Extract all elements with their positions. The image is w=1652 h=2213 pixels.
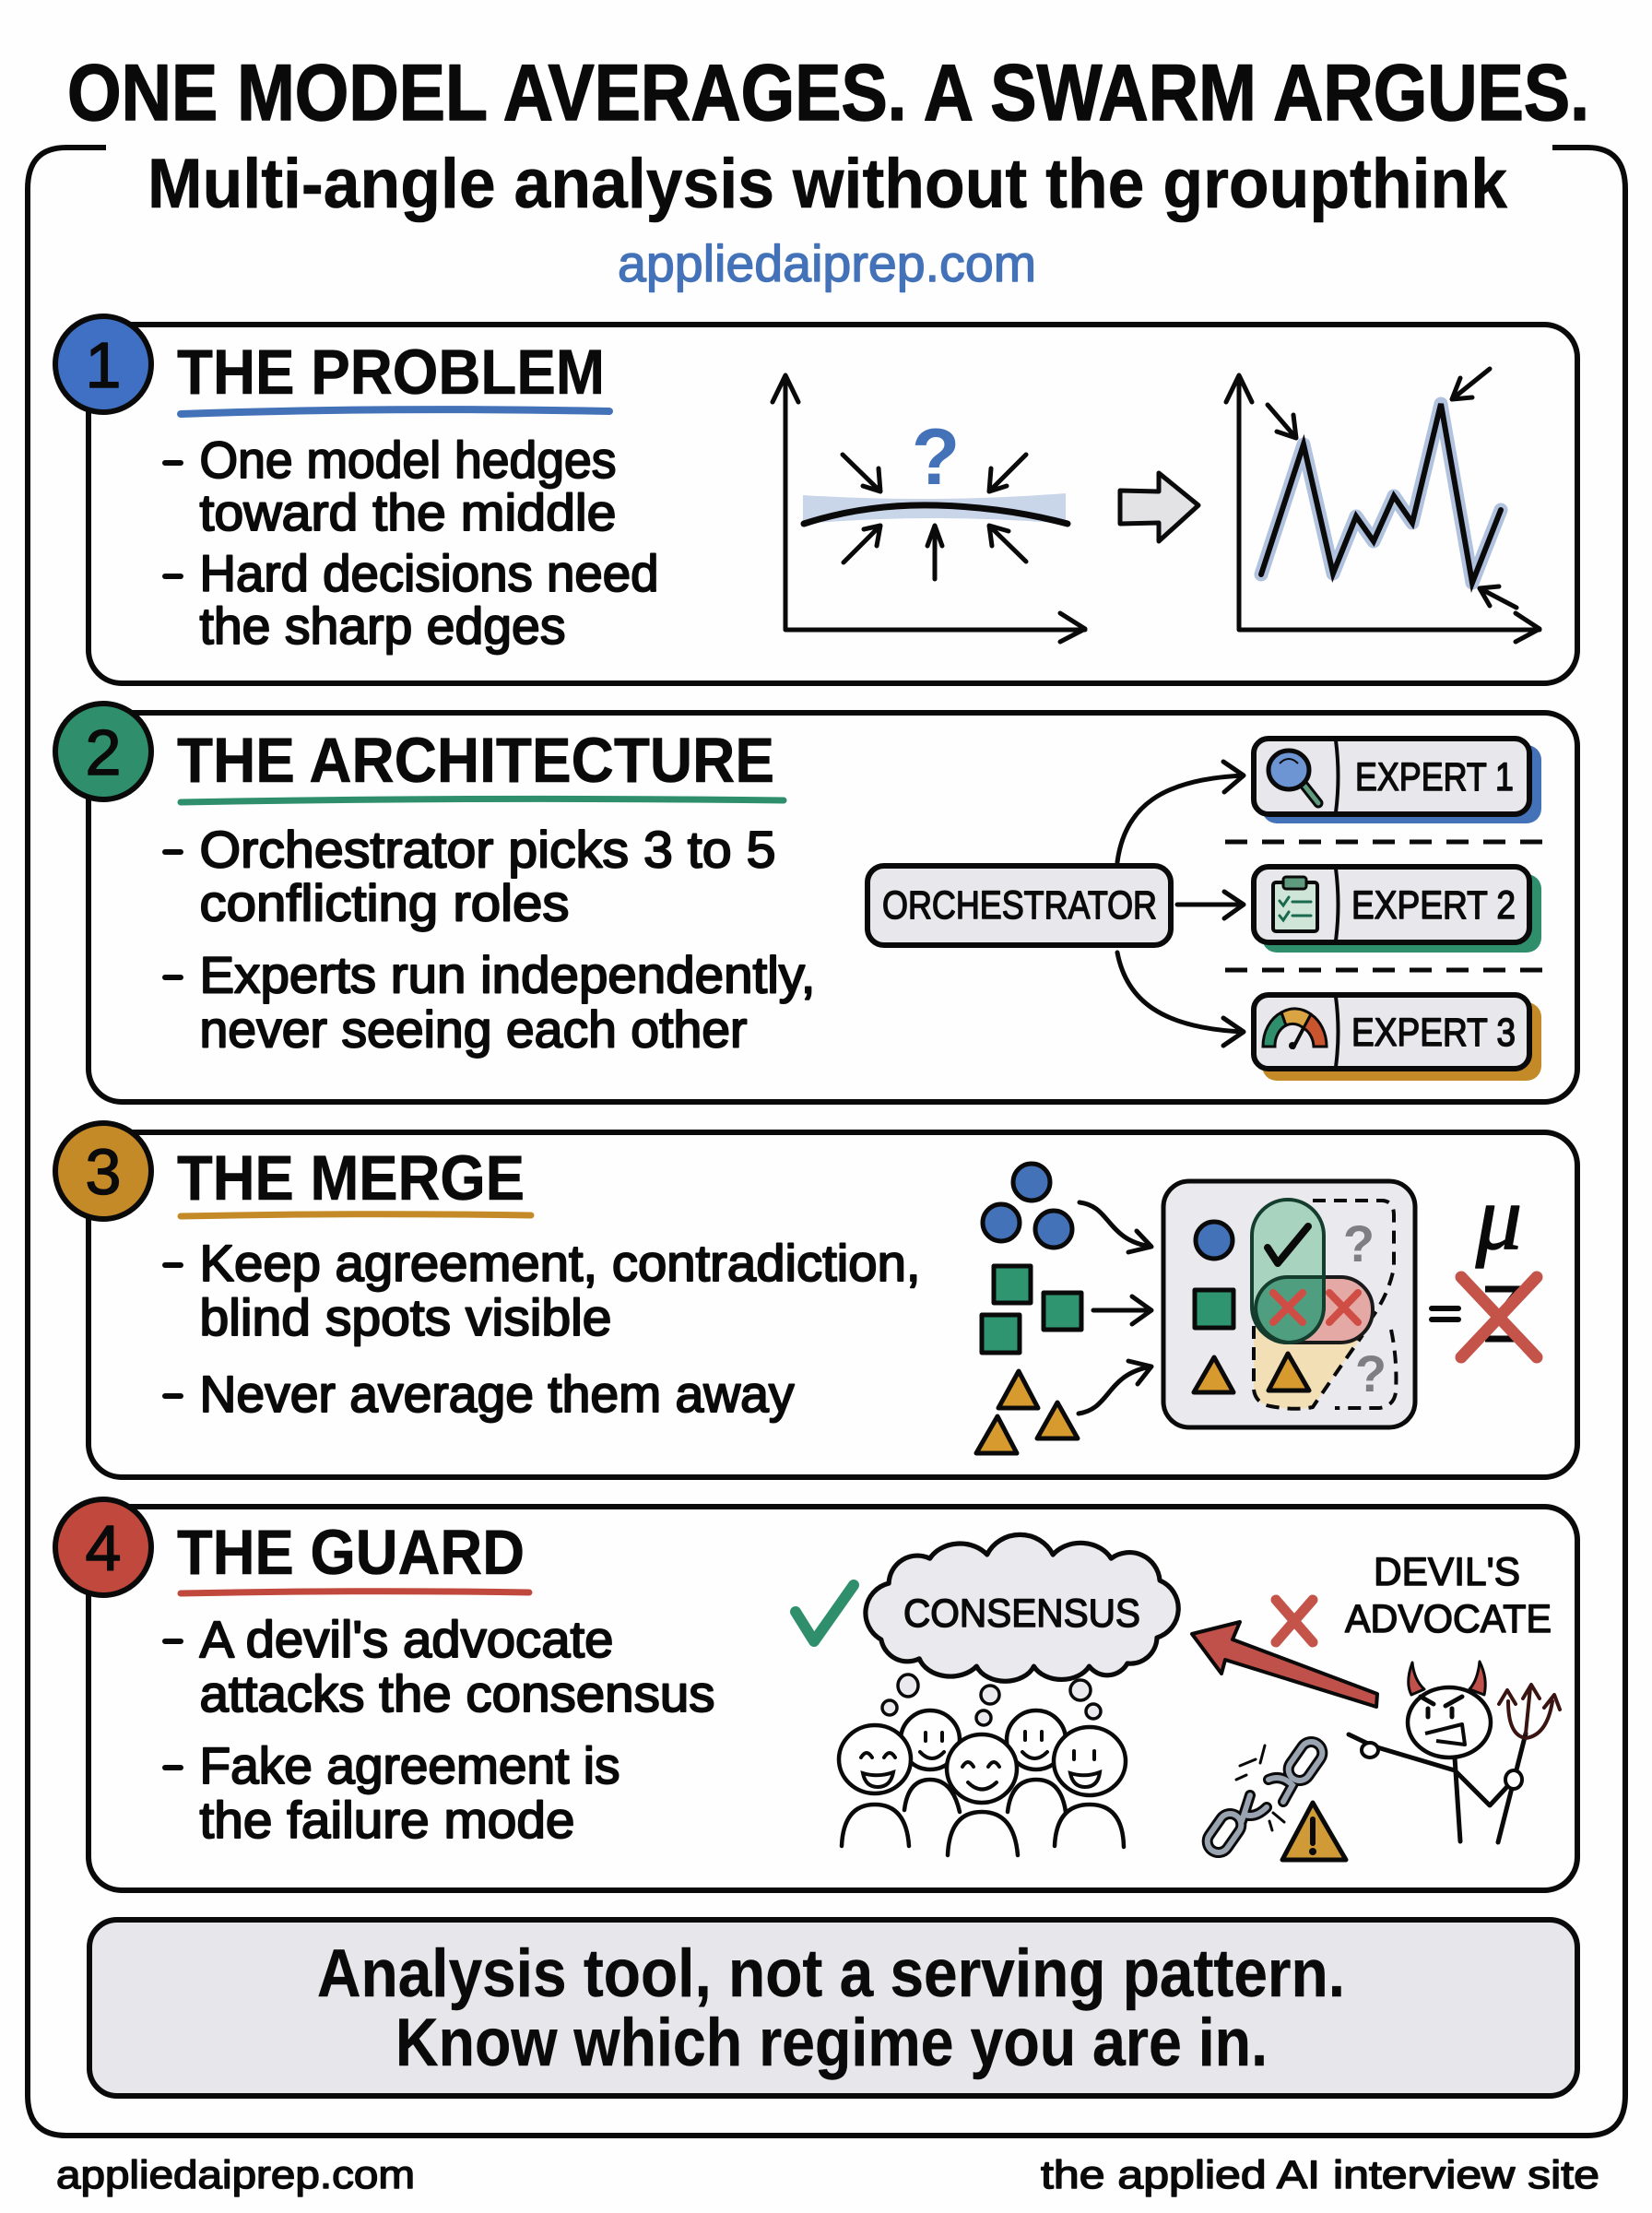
board shapes	[1196, 1222, 1233, 1259]
heading underline	[181, 799, 784, 802]
subtitle: Multi-angle analysis without the groupthink	[148, 145, 1508, 223]
agreeing crowd	[839, 1710, 1126, 1855]
thought bubbles	[882, 1675, 1101, 1725]
panel: the problem	[55, 316, 1577, 683]
site link: appliedaiprep.com	[618, 234, 1036, 292]
merge board	[1163, 1181, 1415, 1427]
number badge 1	[55, 316, 151, 412]
not-the-mean symbol	[1432, 1166, 1537, 1357]
devil's advocate label	[1345, 1550, 1552, 1641]
bullets: architecture	[162, 821, 815, 1059]
bullets: guard: attacks the consensus	[199, 1664, 715, 1722]
icon: red x	[1276, 1600, 1313, 1642]
number badge 3	[55, 1123, 151, 1219]
number badge 3: 3	[86, 1136, 121, 1208]
inputs: amber triangles	[976, 1371, 1078, 1453]
attack arrow	[1192, 1622, 1377, 1707]
heading: the guard: THE GUARD	[177, 1517, 525, 1588]
heading: the architecture: THE ARCHITECTURE	[177, 725, 774, 796]
number badge 4	[55, 1499, 151, 1595]
devil figure	[1349, 1662, 1560, 1842]
expert card 3	[1254, 995, 1541, 1081]
icon: gauge	[1263, 1009, 1327, 1049]
bullets: problem: the sharp edges	[199, 597, 566, 655]
bullets: guard: the failure mode	[199, 1791, 575, 1849]
number badge 2: 2	[86, 716, 121, 788]
bullets: architecture: Orchestrator picks 3 to 5	[199, 821, 776, 878]
icon: warning triangle	[1282, 1803, 1346, 1860]
consensus cloud	[866, 1534, 1178, 1681]
bullets: architecture: never seeing each other	[199, 1000, 747, 1059]
devil's advocate label: DEVIL'S	[1374, 1550, 1520, 1594]
inputs: blue circles	[983, 1164, 1072, 1248]
bullets: merge: Keep agreement, contradiction,	[199, 1234, 920, 1292]
expert card 2: EXPERT 2	[1351, 883, 1516, 928]
icon: magnifier	[1268, 751, 1318, 803]
not-the-mean symbol: μ	[1475, 1166, 1522, 1269]
inputs: green squares	[982, 1266, 1081, 1353]
consensus cloud: CONSENSUS	[903, 1592, 1140, 1636]
number badge 2	[55, 704, 151, 799]
chart: flat averaged line: ?	[912, 413, 960, 502]
arrow: flat to spiky	[1120, 473, 1198, 541]
devil's advocate label: ADVOCATE	[1345, 1597, 1552, 1641]
footer left: appliedaiprep.com	[56, 2153, 415, 2197]
blind-spot triangle	[1268, 1354, 1309, 1391]
bullets: problem	[162, 431, 658, 655]
blind-spot question marks: ?	[1343, 1214, 1375, 1272]
contradiction marks	[1273, 1293, 1358, 1322]
bullets: problem: Hard decisions need	[199, 544, 658, 602]
icon: clipboard	[1273, 877, 1317, 931]
icon: green check	[796, 1585, 854, 1641]
expert card 1	[1254, 739, 1541, 823]
dashed blind-spot outline	[1313, 1201, 1396, 1408]
expert card 1: EXPERT 1	[1355, 755, 1514, 799]
bullets: guard: A devil's advocate	[199, 1610, 614, 1668]
heading underline	[181, 1214, 531, 1216]
heading underline	[181, 1592, 529, 1593]
bullets: guard: Fake agreement is	[199, 1736, 620, 1794]
orchestrator box	[867, 866, 1171, 945]
arrows: into merge box	[1079, 1202, 1151, 1414]
flow arrows: orchestrator to experts	[1117, 762, 1244, 1046]
callout: bottom takeaway	[89, 1920, 1577, 2096]
bullets: merge: blind spots visible	[199, 1288, 612, 1346]
merge board: ?	[1355, 1344, 1386, 1402]
expert card 2	[1254, 867, 1541, 953]
callout: bottom takeaway: Analysis tool, not a serving pattern.	[317, 1936, 1345, 2011]
overlap capsules	[1255, 1277, 1373, 1343]
broken chain	[1203, 1737, 1327, 1857]
expert card 3: EXPERT 3	[1351, 1011, 1516, 1055]
bullets: problem: One model hedges	[199, 431, 616, 489]
orchestrator box: ORCHESTRATOR	[882, 883, 1157, 928]
bullets: merge	[162, 1234, 920, 1423]
heading: the merge: THE MERGE	[177, 1142, 525, 1213]
panel: the guard	[55, 1499, 1577, 1890]
bullets: problem: toward the middle	[199, 483, 616, 541]
heading underline	[181, 409, 609, 414]
agreement check	[1268, 1226, 1308, 1263]
isolation dashes	[1225, 842, 1543, 970]
panel: the merge	[55, 1123, 1577, 1477]
bullets: architecture: Experts run independently,	[199, 946, 815, 1003]
number badge 4: 4	[86, 1512, 121, 1584]
chart: sharp edges line	[1226, 369, 1540, 642]
bullets: merge: Never average them away	[199, 1365, 795, 1423]
heading: the problem: THE PROBLEM	[177, 337, 605, 408]
number badge 1: 1	[86, 329, 121, 401]
bullets: guard	[162, 1610, 715, 1849]
bullets: architecture: conflicting roles	[199, 874, 570, 931]
footer right: the applied AI interview site	[1041, 2153, 1599, 2197]
amber blind-spot region	[1254, 1326, 1363, 1409]
chart: flat averaged line	[773, 375, 1085, 642]
callout: bottom takeaway: Know which regime you are in.	[395, 2006, 1268, 2080]
panel: the architecture	[55, 704, 1577, 1102]
